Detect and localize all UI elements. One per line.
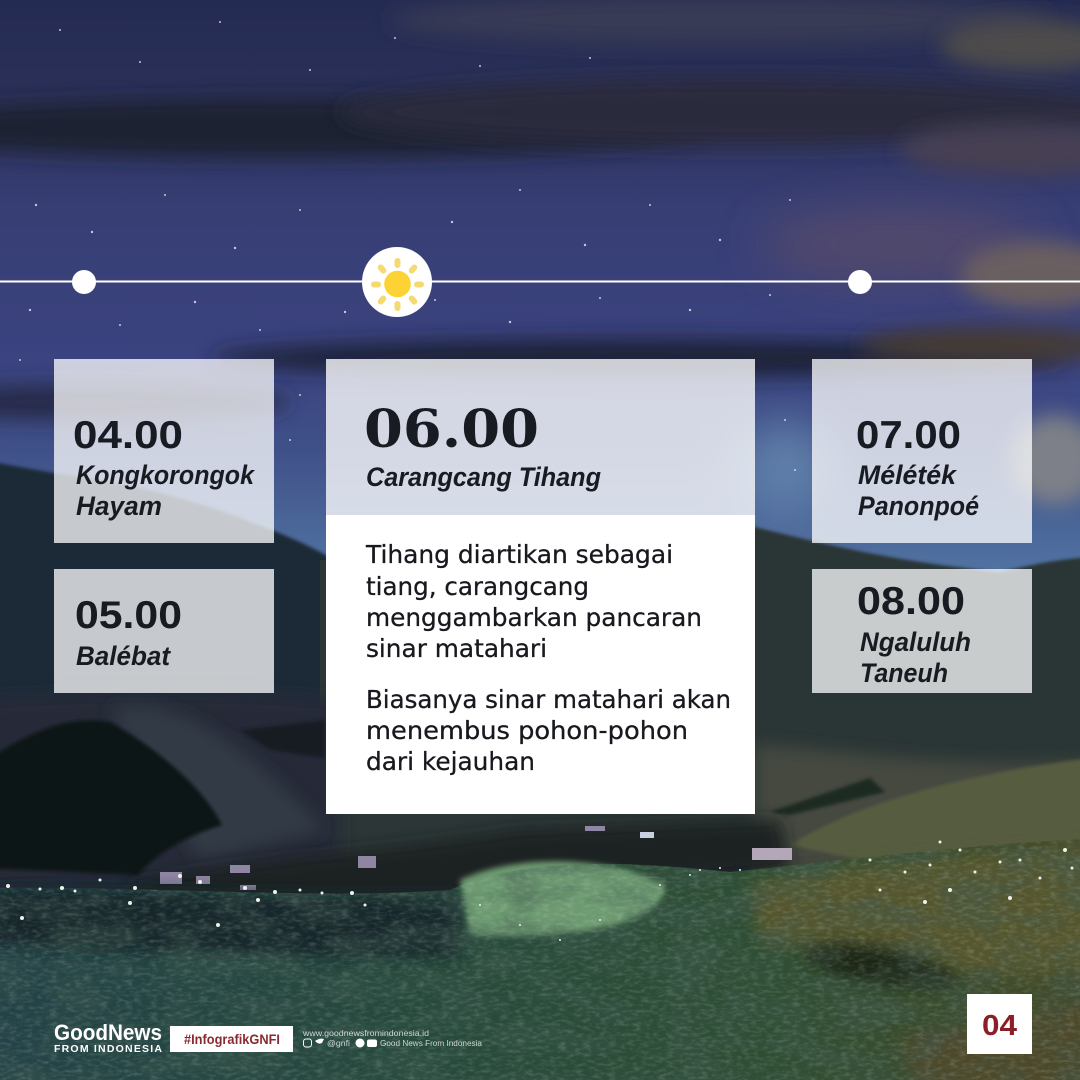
heading: 06.00: Carangcang Tihang <box>366 462 601 492</box>
panel: 05.00 Balebat <box>54 569 274 693</box>
icon: instagram <box>304 1039 312 1047</box>
text block: description: Tihang diartikan sebagai <box>365 540 673 569</box>
panel: 08.00 Ngaluluh Taneuh <box>812 569 1032 693</box>
marker: 07.00 <box>848 270 872 294</box>
social media links: www.goodnewsfromindonesia.id <box>302 1029 429 1038</box>
icon: sun marker <box>362 247 432 317</box>
icon: facebook <box>356 1038 364 1048</box>
panel: 08.00 Ngaluluh Taneuh: Ngaluluh <box>860 627 971 657</box>
icon: youtube <box>367 1040 377 1047</box>
social media links <box>302 1029 483 1048</box>
panel: 06.00 Carangcang Tihang detail <box>326 359 755 814</box>
panel: 05.00 Balebat: Balébat <box>76 641 171 671</box>
logo: GoodNews From Indonesia: FROM INDONESIA <box>54 1043 162 1055</box>
text block: description: Biasanya sinar matahari akan <box>366 685 731 714</box>
panel: 07.00 Meletek Panonpoe: 07.00 <box>856 414 961 457</box>
icon: twitter <box>315 1039 324 1044</box>
text block: description: menembus pohon-pohon <box>366 716 688 745</box>
panel: 07.00 Meletek Panonpoe: Méléték <box>858 460 958 490</box>
logo: GoodNews From Indonesia <box>54 1020 162 1055</box>
text block: description: dari kejauhan <box>366 747 535 776</box>
panel: 04.00 Kongkorongok Hayam: Hayam <box>76 491 162 521</box>
text block: description: tiang, carangcang <box>366 572 589 601</box>
heading: 06.00: 06.00 <box>364 399 539 460</box>
heading: 06.00 <box>326 359 755 515</box>
dark forest <box>0 720 222 875</box>
text block: description <box>326 515 755 814</box>
panel: 04.00 Kongkorongok Hayam <box>54 359 274 543</box>
grass <box>0 838 1080 1080</box>
social media links: @gnfi <box>327 1039 350 1048</box>
timeline <box>0 247 1080 317</box>
panel: 05.00 Balebat: 05.00 <box>75 594 182 637</box>
page number: 04 <box>982 1010 1017 1042</box>
page number <box>967 994 1032 1054</box>
panel: 04.00 Kongkorongok Hayam: 04.00 <box>73 414 183 457</box>
hashtag badge: #InfografikGNFI <box>184 1031 280 1047</box>
panel: 08.00 Ngaluluh Taneuh: Taneuh <box>860 658 948 688</box>
social media links: Good News From Indonesia <box>380 1039 483 1048</box>
hashtag badge <box>170 1026 293 1052</box>
text block: description: menggambarkan pancaran <box>366 603 702 632</box>
mountains <box>0 458 335 920</box>
text block: description: sinar matahari <box>366 634 547 663</box>
panel: 04.00 Kongkorongok Hayam: Kongkorongok <box>76 460 256 490</box>
marker: 04.00 <box>72 270 96 294</box>
panel: 08.00 Ngaluluh Taneuh: 08.00 <box>857 580 965 623</box>
panel: 07.00 Meletek Panonpoe: Panonpoé <box>858 491 979 521</box>
logo: GoodNews From Indonesia: GoodNews <box>54 1020 162 1045</box>
village <box>130 820 790 900</box>
stars <box>19 21 796 471</box>
flowers <box>6 840 1074 941</box>
panel: 07.00 Meletek Panonpoe <box>812 359 1032 543</box>
